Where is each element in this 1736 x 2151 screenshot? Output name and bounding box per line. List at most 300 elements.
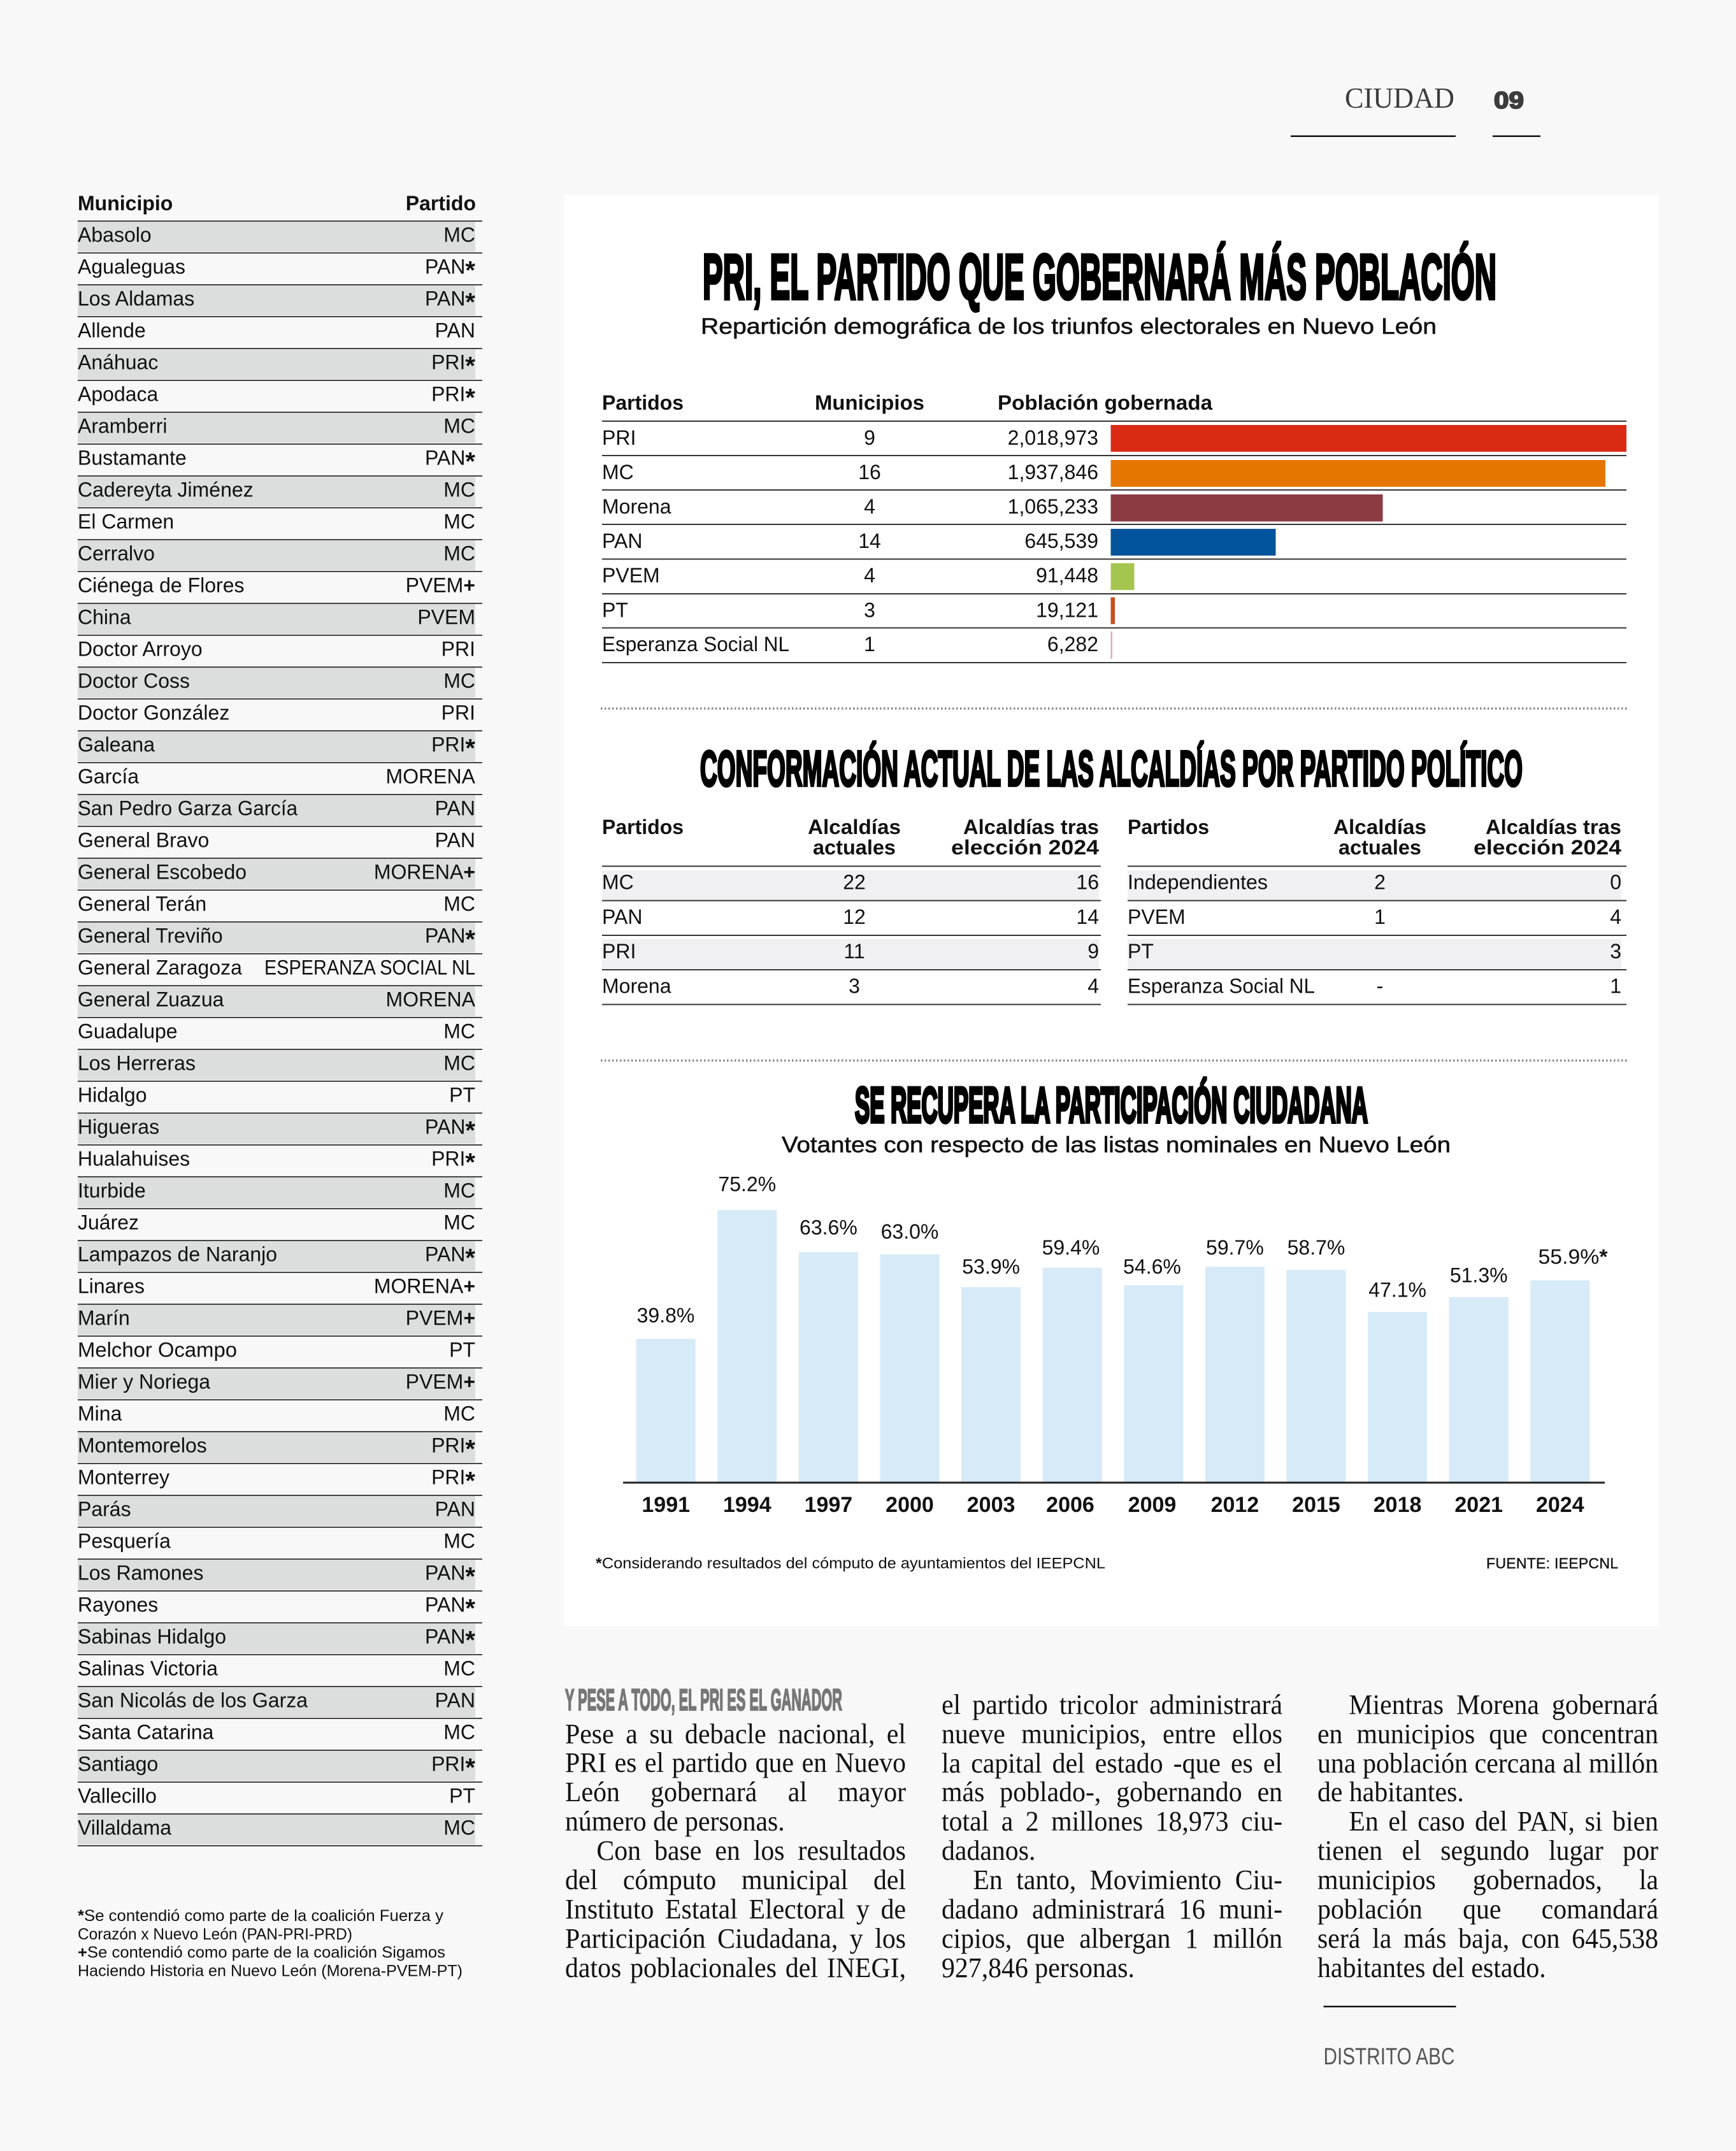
row: Rayones: * [465,1594,475,1622]
row: MC: 1,937,846 [1008,461,1098,484]
row: General Zaragoza [78,956,475,979]
table header [602,391,1212,414]
row: Esperanza Social NL [1128,975,1621,998]
row: Cadereyta Jiménez: Cadereyta Jiménez [78,478,254,501]
list footnotes: Haciendo Historia en Nuevo León (Morena-PVEM-PT) [78,1962,463,1980]
row: Independientes: Independientes [1128,870,1268,893]
row: PT: 3 [864,599,875,622]
article column 3: será la más baja, con 645,538 [1317,1923,1658,1954]
row: General Terán [78,892,475,915]
table header: Partidos [602,391,684,414]
article column 2: la capital del estado -que es el [942,1748,1282,1779]
bar 2003: 53.9%: 53.9% [962,1255,1020,1278]
row: Lampazos de Naranjo: Lampazos de Naranjo [78,1242,277,1265]
row: Doctor González: Doctor González [78,701,229,724]
row: Esperanza Social NL: Esperanza Social NL [602,633,789,656]
row: General Treviño: * [465,925,475,953]
row: Montemorelos [78,1432,475,1463]
row: Mier y Noriega [78,1369,475,1399]
row: El Carmen: El Carmen [78,510,174,533]
right table header: Partidos [1128,816,1209,838]
row: Cadereyta Jiménez [78,477,475,507]
row: Aramberri [78,413,475,443]
row: Los Aldamas: * [465,288,475,316]
left table header [602,816,1099,859]
row: General Treviño: General Treviño [78,924,223,947]
row: Higueras: * [465,1116,475,1144]
row: General Escobedo: General Escobedo [78,860,247,883]
row: Esperanza Social NL: 1 [864,633,875,656]
row: Sabinas Hidalgo [78,1623,475,1654]
left table header: Partidos [602,816,684,838]
left table header: actuales [813,836,896,859]
right table header: Alcaldías [1333,816,1426,838]
row: Hidalgo [78,1083,475,1106]
bar 1994: 75.2%: 75.2% [718,1172,776,1195]
row: Morena [602,494,1382,521]
bar 2021: 51.3%: 51.3% [1450,1264,1508,1287]
right table header: elección 2024 [1474,836,1621,859]
row: MC: 22 [843,870,866,893]
bar 2009: 54.6%: 2009 [1128,1493,1176,1517]
row: Parás: PAN [435,1497,475,1520]
row: Rayones: Rayones [78,1593,158,1616]
list footnotes: Corazón x Nuevo León (PAN-PRI-PRD) [78,1925,352,1943]
article column 3: de habitantes. [1317,1776,1463,1808]
row: General Treviño [78,923,475,953]
row: MC [602,870,1099,893]
row: Juárez: Juárez [78,1211,139,1234]
page header: section and page number [1291,82,1540,137]
row: PRI: 9 [864,426,875,449]
row: PAN: 14 [1076,905,1099,928]
bar 2006: 59.4% [1042,1236,1102,1517]
list heading: Partido [406,192,476,215]
bar 2003: 53.9% [961,1255,1021,1517]
article column 2: 927,846 personas. [942,1952,1135,1983]
row: Cadereyta Jiménez: MC [443,478,475,501]
row: General Terán: General Terán [78,892,206,915]
row: Parás [78,1496,475,1526]
row: Doctor Coss: MC [443,669,475,692]
row: San Pedro Garza García: PAN [435,796,475,819]
row: Doctor Arroyo [78,637,475,660]
row: Los Aldamas: PAN [425,287,465,310]
row: Anáhuac [78,349,475,380]
row: Hualahuises [78,1147,475,1176]
row: Sabinas Hidalgo: PAN [425,1625,465,1648]
row: Morena: 4 [864,495,875,518]
row: Morena: Morena [602,495,671,518]
row: Los Herreras [78,1050,475,1080]
row: Vallecillo: Vallecillo [78,1784,157,1807]
row: General Bravo: PAN [435,828,475,851]
row: PRI: PRI [602,426,636,449]
row: Allende: PAN [435,319,475,342]
row: PT: 19,121 [1036,599,1098,622]
row: PVEM: 4 [1610,905,1621,928]
row: Santiago [78,1751,475,1781]
row: Hidalgo: PT [449,1083,475,1106]
row: General Treviño: PAN [425,924,465,947]
row: MC: MC [602,461,634,484]
article column 1: PRI es el partido que en Nuevo [565,1747,906,1778]
row: Galeana: PRI [431,733,465,756]
article column 1: Pese a su debacle nacional, el [565,1718,906,1750]
row: Mier y Noriega: PVEM+ [406,1370,475,1393]
row: Santa Catarina: Santa Catarina [78,1720,214,1743]
row: Parás: Parás [78,1497,131,1520]
bar 2009: 54.6% [1123,1255,1183,1517]
article column 2 [942,1689,1282,1983]
table: town halls, left [602,816,1101,1004]
row: Los Herreras: MC [443,1051,475,1074]
row: General Zuazua [78,986,476,1016]
row: Morena [602,975,1099,998]
article column 2: total a 2 millones 18,973 ciu- [942,1806,1282,1837]
list footnotes: *Se contendió como parte de la coalición Fuerza y [78,1907,444,1925]
chart axis [623,1482,1605,1483]
row: Salinas Victoria: MC [443,1657,475,1680]
row: PVEM: PVEM [1128,905,1186,928]
article column 2: cipios, que albergan 1 millón [942,1923,1282,1954]
text: Y PESE A TODO, EL PRI ES EL GANADOR [565,1683,842,1716]
row: Abasolo: MC [443,223,475,246]
bar chart: turnout 1991–2024 [623,1172,1608,1517]
section name: CIUDAD [1345,82,1454,114]
row: PT [602,598,1115,624]
bar 2000: 63.0%: 63.0% [881,1220,938,1243]
row: Hualahuises: Hualahuises [78,1147,190,1170]
row: Los Ramones: * [465,1562,475,1590]
row: PVEM [1128,905,1621,928]
row: Bustamante: Bustamante [78,446,187,469]
table header: Población gobernada [998,391,1212,414]
article column 1: Con base en los resultados [596,1835,906,1866]
row: PRI [602,425,1626,452]
row: General Zuazua: MORENA [386,988,476,1011]
row: Higueras [78,1114,475,1144]
row: Pesquería [78,1529,475,1552]
row: Bustamante: PAN [425,446,465,469]
row: PVEM: PVEM [602,564,660,587]
bar 2024: 55.9%: 2024 [1536,1493,1584,1517]
list heading [78,192,476,215]
article column 1: del cómputo municipal del [565,1864,906,1896]
row: China: China [78,605,131,628]
row: Apodaca [78,382,475,412]
article column 2: el partido tricolor administrará [942,1689,1282,1720]
row: Lampazos de Naranjo: * [465,1244,475,1272]
row: Lampazos de Naranjo: PAN [425,1242,465,1265]
row: PAN: 645,539 [1024,529,1098,552]
row: Los Ramones [78,1560,475,1590]
row: Galeana: * [465,734,475,762]
row: Anáhuac: Anáhuac [78,350,158,373]
row: PAN [602,905,1099,928]
article column 2: nueve municipios, entre ellos [942,1718,1282,1750]
bar 2015: 58.7%: 58.7% [1288,1236,1345,1259]
bar 2012: 59.7%: 59.7% [1206,1236,1264,1259]
row: Esperanza Social NL [602,631,1112,659]
row: Apodaca: * [465,384,475,412]
bar 1997: 63.6% [799,1216,858,1517]
row: Melchor Ocampo: Melchor Ocampo [78,1338,237,1361]
article column 1: Participación Ciudadana, y los [565,1923,906,1954]
row: Allende: Allende [78,319,146,342]
row: Marín: PVEM+ [406,1306,475,1329]
row: Los Aldamas: Los Aldamas [78,287,194,310]
row: General Terán: MC [443,892,475,915]
row: General Bravo: General Bravo [78,828,209,851]
row: Doctor Arroyo: PRI [441,637,475,660]
row: Villaldama: Villaldama [78,1816,171,1839]
row: Monterrey: PRI [431,1465,465,1488]
row: Monterrey [78,1465,475,1495]
right table header: actuales [1338,836,1421,859]
right table header [1128,816,1621,859]
article column 2: dadanos. [942,1835,1035,1866]
row: Montemorelos: * [465,1435,475,1463]
row: Bustamante [78,446,475,475]
bar 2018: 47.1% [1368,1279,1427,1517]
row: Aramberri: MC [443,414,475,437]
row: PVEM: 1 [1374,905,1386,928]
row: Doctor González: PRI [441,701,475,724]
row: Aramberri: Aramberri [78,414,167,437]
row: García [78,765,476,788]
row: Guadalupe: Guadalupe [78,1019,178,1042]
row: Iturbide [78,1177,475,1207]
row: PAN: PAN [602,529,642,552]
bar 2021: 51.3% [1449,1264,1509,1517]
row: PT: PT [1128,940,1154,963]
row: García: García [78,765,139,788]
row: Doctor Coss: Doctor Coss [78,669,190,692]
row: Sabinas Hidalgo: Sabinas Hidalgo [78,1625,226,1648]
article column 3: En el caso del PAN, si bien [1349,1806,1658,1837]
row: Iturbide: Iturbide [78,1179,146,1202]
row: Higueras: Higueras [78,1115,159,1138]
row: PT: PT [602,599,628,622]
row: MC [602,460,1605,487]
subtitle: citizen participation: Votantes con respecto de las listas nominales en Nuevo León [782,1133,1451,1157]
row: Esperanza Social NL: 6,282 [1047,633,1098,656]
article column 3: habitantes del estado. [1317,1952,1546,1983]
row: Linares [78,1274,475,1297]
row: General Escobedo [78,859,475,889]
bar 2021: 51.3%: 2021 [1454,1493,1503,1517]
row: Rayones [78,1593,475,1622]
row: Santiago: * [465,1753,475,1781]
left table header: Alcaldías [808,816,901,838]
list footnotes [78,1907,463,1980]
row: Pesquería: Pesquería [78,1529,171,1552]
article column 3 [1317,1689,1658,1983]
row: China: PVEM [417,605,475,628]
row: Morena: 3 [849,975,860,998]
row: García: MORENA [386,765,476,788]
row: Independientes: 2 [1374,870,1386,893]
row: Santa Catarina [78,1720,475,1743]
row: Mina [78,1402,475,1425]
bar 1994: 75.2% [717,1172,777,1517]
bar 2006: 59.4%: 2006 [1046,1493,1094,1517]
article column 1: Instituto Estatal Electoral y de [565,1894,906,1925]
row: Esperanza Social NL: Esperanza Social NL [1128,975,1315,998]
row: PRI: 9 [1087,940,1099,963]
bar 1997: 63.6%: 1997 [805,1493,852,1517]
row: China [78,604,475,634]
row: Villaldama [78,1815,475,1845]
subtitle: PRI population: Repartición demográfica de los triunfos electorales en Nuevo León [701,314,1437,339]
row: Lampazos de Naranjo [78,1241,475,1272]
row: PRI: PRI [602,940,636,963]
row: Santa Catarina: MC [443,1720,475,1743]
row: Pesquería: MC [443,1529,475,1552]
author rule and byline: DISTRITO ABC [1324,2043,1455,2069]
bar 2003: 53.9%: 2003 [967,1493,1015,1517]
row: Juárez [78,1211,475,1234]
row: Hualahuises: * [465,1148,475,1176]
row: Linares: Linares [78,1274,145,1297]
row: Morena: 1,065,233 [1008,495,1098,518]
row: Montemorelos: Montemorelos [78,1434,207,1457]
row: Mina: MC [443,1402,475,1425]
article column 1 [565,1718,906,1983]
row: PRI: 2,018,973 [1008,426,1098,449]
row: Morena: 4 [1087,975,1099,998]
row: El Carmen: MC [443,510,475,533]
bar 2012: 59.7% [1205,1236,1265,1517]
row: Allende [78,319,475,342]
article column 1: datos poblacionales del INEGI, [565,1952,906,1983]
bar 1997: 63.6%: 63.6% [800,1216,857,1239]
row: PT [1128,940,1621,963]
row: Melchor Ocampo: PT [449,1338,475,1361]
row: Ciénega de Flores [78,573,475,596]
list heading: Municipio [78,192,173,215]
row: Agualeguas: Agualeguas [78,255,185,278]
row: PT: 3 [1610,940,1621,963]
bar 2015: 58.7%: 2015 [1292,1493,1340,1517]
row: PRI: 11 [843,940,865,963]
row: General Zaragoza: General Zaragoza [78,956,242,979]
article column 2: dadano administrará 16 muni- [942,1894,1282,1925]
bar 2000: 63.0% [880,1220,939,1517]
row: San Pedro Garza García: San Pedro Garza García [78,796,298,819]
row: Los Aldamas [78,285,475,316]
row: Apodaca: Apodaca [78,382,159,405]
bar 2015: 58.7% [1287,1236,1345,1517]
row: Bustamante: * [465,447,475,475]
row: Mina: Mina [78,1402,122,1425]
row: Santiago: Santiago [78,1752,158,1775]
row: PRI [602,940,1099,963]
row: General Zuazua: General Zuazua [78,988,224,1011]
bar 2012: 59.7%: 2012 [1211,1493,1259,1517]
table header: Municipios [815,391,924,414]
row: San Nicolás de los Garza [78,1687,475,1717]
row: Monterrey: * [465,1467,475,1495]
row: PAN: 14 [858,529,881,552]
row: MC: 16 [858,461,881,484]
bar 1994: 75.2%: 1994 [723,1493,771,1517]
row: Ciénega de Flores: PVEM+ [406,573,475,596]
row: Melchor Ocampo [78,1338,475,1361]
source credit: FUENTE: IEEPCNL [1486,1555,1618,1571]
row: Ciénega de Flores: Ciénega de Flores [78,573,244,596]
row: Esperanza Social NL: - [1377,975,1383,998]
table with bar chart: population governed by party [602,391,1626,663]
bar 2024: 55.9% [1530,1246,1608,1517]
row: PVEM: 4 [864,564,875,587]
article column 2: más poblado-, gobernando en [942,1776,1282,1808]
row: San Nicolás de los Garza: PAN [435,1688,475,1711]
row: Doctor Coss [78,668,475,698]
article column 3: en municipios que concentran [1317,1718,1658,1750]
row: Apodaca: PRI [431,382,465,405]
row: Agualeguas: PAN [425,255,465,278]
row: Agualeguas [78,255,475,284]
row: Marín [78,1305,475,1335]
row: Salinas Victoria: Salinas Victoria [78,1657,218,1680]
row: El Carmen [78,510,475,533]
row: Independientes [1128,870,1621,893]
row: Anáhuac: PRI [431,350,465,373]
article column 3: una población cercana al millón [1317,1748,1658,1779]
row: Los Ramones: Los Ramones [78,1561,203,1584]
row: San Nicolás de los Garza: San Nicolás de los Garza [78,1688,308,1711]
article column 1: León gobernará al mayor [565,1776,906,1808]
row: Doctor González [78,701,475,724]
row: Mier y Noriega: Mier y Noriega [78,1370,210,1393]
row: Marín: Marín [78,1306,130,1329]
bar 2000: 63.0%: 2000 [886,1493,934,1517]
row: Abasolo [78,222,475,252]
row: Rayones: PAN [425,1593,465,1616]
row: General Zaragoza: ESPERANZA SOCIAL NL [264,956,475,979]
bar 1991: 39.8%: 1991 [642,1493,690,1517]
article column 3: municipios gobernados, la [1317,1864,1658,1896]
row: Cerralvo: Cerralvo [78,542,155,565]
row: Salinas Victoria [78,1657,475,1680]
row: Iturbide: MC [443,1179,475,1202]
article column 2: En tanto, Movimiento Ciu- [973,1864,1282,1896]
row: Anáhuac: * [465,352,475,380]
row: Esperanza Social NL: 1 [1610,975,1621,998]
panel: white infographic card [564,195,1659,1626]
row: Hualahuises: PRI [431,1147,465,1170]
row: Hidalgo: Hidalgo [78,1083,147,1106]
row: Guadalupe: MC [443,1019,475,1042]
row: Monterrey: Monterrey [78,1465,169,1488]
article column 1: número de personas. [565,1806,785,1837]
row: Juárez: MC [443,1211,475,1234]
row: Santiago: PRI [431,1752,465,1775]
row: Vallecillo: PT [449,1784,475,1807]
row: Montemorelos: PRI [431,1434,465,1457]
bar 1991: 39.8%: 39.8% [637,1304,694,1327]
row: Higueras: PAN [425,1115,465,1138]
row: Agualeguas: * [465,256,475,284]
row: Cerralvo: MC [443,542,475,565]
right table header: Alcaldías tras [1486,816,1621,838]
row: MC: MC [602,870,634,893]
row: Independientes: 0 [1610,870,1621,893]
table: town halls, right [1128,816,1626,1004]
page number: 09 [1494,87,1524,113]
